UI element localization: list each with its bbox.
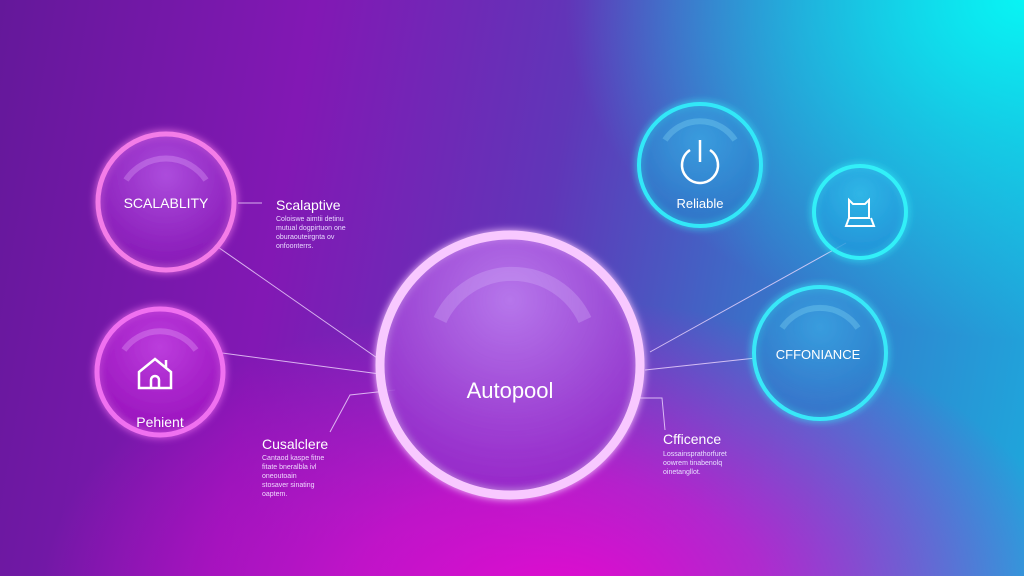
text: scalaptive: mutual dogpirtuon one — [276, 225, 346, 232]
circle: scalability: SCALABLITY — [124, 195, 209, 211]
circle: center autopool — [380, 235, 640, 495]
text: scalaptive: Scalaptive — [276, 197, 341, 213]
circle: pehient: Pehient — [136, 414, 184, 430]
text: scalaptive: Coloiswe aimtii detinu — [276, 216, 344, 223]
text: scalaptive — [276, 197, 346, 250]
text: cusalclere: fitate bneralbla ivl — [262, 464, 317, 471]
icon: robot — [846, 200, 874, 226]
connector lines — [215, 203, 846, 432]
text: efficence: oowrem tinabenolq — [663, 460, 722, 467]
text: cusalclere: oneoutoain — [262, 473, 297, 480]
circle: cffoniance — [754, 287, 886, 419]
circle: cffoniance: CFFONIANCE — [776, 347, 861, 362]
icon: power — [682, 140, 718, 183]
text: efficence: Lossainsprathorfuret — [663, 451, 727, 458]
text: scalaptive: oburaouteirgnta ov — [276, 234, 335, 241]
text: efficence: oinetangllot. — [663, 469, 701, 476]
circle: scalability — [98, 134, 234, 270]
text: cusalclere: oaptem. — [262, 491, 287, 498]
circle: reliable — [639, 104, 761, 226]
text: scalaptive: onfoonterrs. — [276, 243, 313, 250]
icon: house — [139, 359, 171, 388]
circle: icon — [814, 166, 906, 258]
text: efficence — [663, 431, 727, 476]
text: cusalclere — [262, 436, 328, 498]
text: cusalclere: Cantaod kaspe fitne — [262, 455, 324, 462]
text: cusalclere: Cusalclere — [262, 436, 328, 452]
circle: center autopool: Autopool — [467, 378, 553, 403]
text: efficence: Cfficence — [663, 431, 721, 447]
text: cusalclere: stosaver sinating — [262, 482, 315, 489]
circle: pehient — [97, 309, 223, 435]
circle: reliable: Reliable — [677, 196, 723, 211]
